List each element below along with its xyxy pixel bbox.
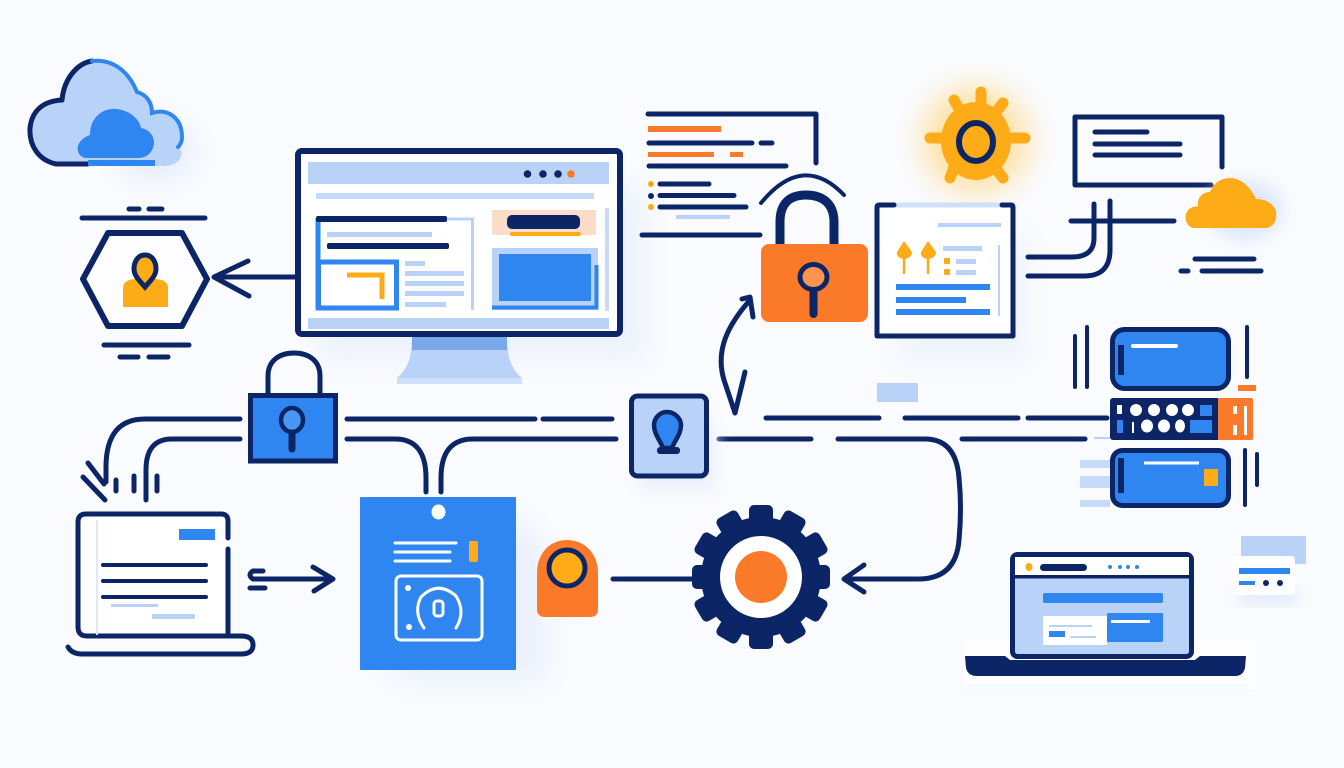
panel: document laptop: [68, 514, 253, 654]
panel: note card: [1075, 117, 1222, 185]
left content block: [316, 216, 472, 310]
icon: user hexagon: [82, 209, 207, 357]
icon: gear: [692, 505, 830, 649]
arrow: monitor to user: [214, 261, 297, 296]
right content block: [492, 208, 609, 311]
server bottom: [1080, 450, 1257, 507]
panel: desktop monitor: [298, 151, 645, 384]
server middle: [1110, 398, 1253, 440]
icon: key box: [632, 396, 715, 490]
laptop base: [965, 656, 1246, 676]
arrow: loop into gear: [838, 439, 960, 592]
connector wires: [1028, 201, 1261, 276]
floating card: [1232, 536, 1306, 602]
chart markers: [897, 241, 982, 275]
icon: orange tag: [537, 540, 598, 617]
arrow: laptop to tag: [250, 567, 333, 591]
arrows: lock to document: [83, 419, 240, 500]
connector lines: lower row: [347, 439, 1085, 492]
server top: [1075, 327, 1256, 391]
laptop screen: [1012, 554, 1192, 656]
icon: blue cloud: [30, 60, 193, 180]
fingerprint reader: [396, 576, 482, 640]
light connector stub: [1094, 437, 1110, 439]
icon: blue padlock: [250, 353, 336, 461]
panel: document with chart: [877, 205, 1025, 360]
panel: server stack: [1075, 327, 1257, 507]
panel: laptop: [960, 554, 1250, 690]
connector: tag to gear: [613, 576, 695, 582]
arrow: curved double: [721, 297, 753, 413]
icon: orange padlock: [761, 175, 868, 322]
monitor stand: [397, 336, 522, 384]
note card lines: [1095, 132, 1180, 155]
monitor screen: [298, 151, 620, 334]
light tag: [877, 383, 918, 402]
icon: orange cloud: [1186, 178, 1283, 240]
icon: sun gear: [922, 86, 1030, 194]
panel backdrop: laptop plate: [964, 640, 1256, 689]
browser bar: [308, 162, 609, 184]
panel: code snippet: [642, 114, 816, 235]
connector lines: upper row: [347, 418, 1107, 419]
panel: blue access tag: [360, 497, 545, 680]
